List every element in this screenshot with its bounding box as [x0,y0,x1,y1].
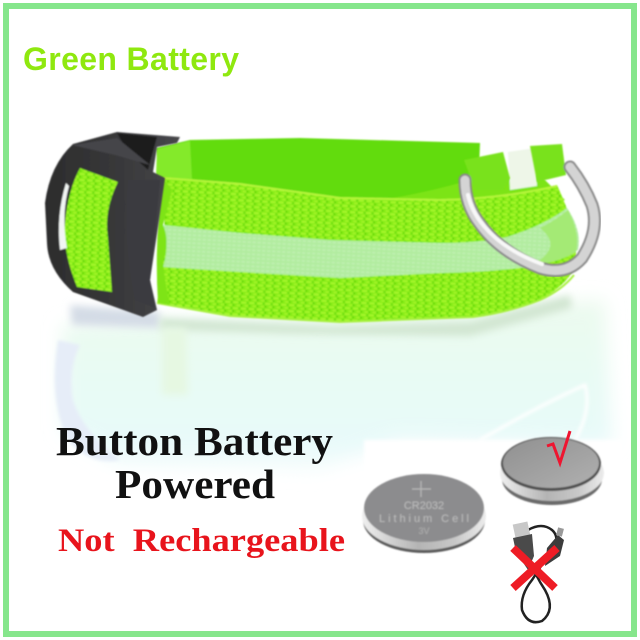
icon: CR2032 battery: CR2032 [404,500,444,512]
white strip between tabs [508,148,537,190]
red check mark [547,431,570,463]
strap fold near buckle [157,178,172,305]
icon: CR2032 battery [362,474,486,553]
d-ring [464,144,594,270]
title: Green Battery [23,41,239,77]
heading: button battery powered [56,418,334,507]
not rechargeable label: Not Rechargeable [58,523,345,559]
icon: button battery with check [500,437,604,505]
collar [156,138,579,322]
heading: button battery powered: Button Battery [56,418,334,464]
buckle slit [59,183,69,250]
heading: button battery powered: Powered [115,461,275,507]
far loop strap [350,175,565,230]
icon: usb cable crossed out [513,521,564,622]
front strap [157,177,576,322]
red cross [513,548,557,588]
icon: CR2032 battery: 3V [418,526,430,536]
buckle slot webbing [64,168,118,292]
back strap inner [156,138,480,205]
LED strip [163,208,579,278]
fabric loops [464,152,510,190]
icon: CR2032 battery: Lithium Cell [379,513,469,525]
buckle [45,132,180,317]
